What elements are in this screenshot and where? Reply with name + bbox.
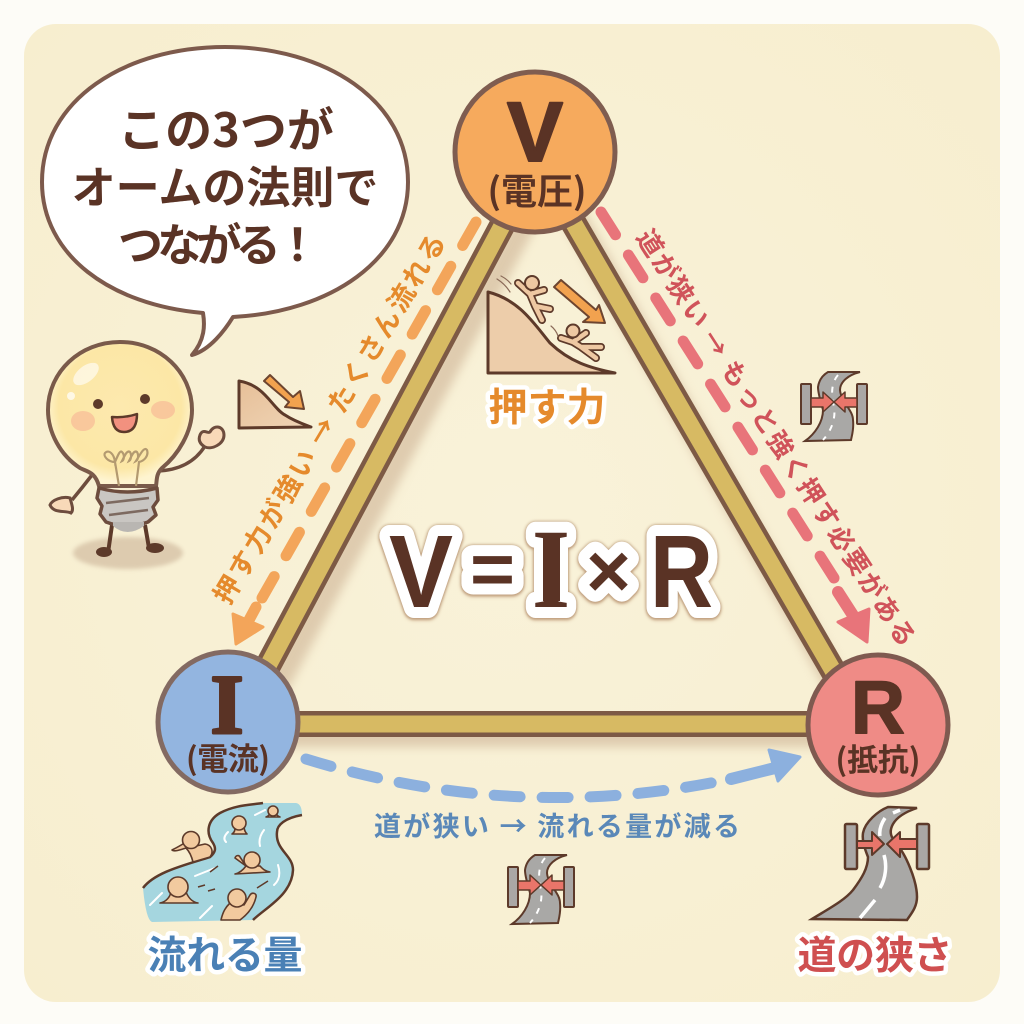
node: I current — [158, 652, 298, 792]
small slope icon — [239, 375, 311, 428]
triangle frame — [237, 160, 865, 735]
large road icon — [812, 807, 929, 920]
node: V voltage: V — [507, 85, 563, 179]
formula: = — [470, 530, 515, 610]
formula: I — [532, 507, 570, 632]
speech bubble: つながる！ — [118, 209, 320, 274]
small road icon: center — [508, 855, 574, 924]
river with swimmers — [143, 803, 302, 922]
node: V voltage — [455, 72, 615, 232]
formula — [389, 507, 713, 632]
node: I current: (電流) — [186, 734, 270, 779]
left edge label: 押す力が強い → たくさん流れる — [202, 225, 453, 610]
light bulb character — [48, 342, 224, 569]
speech bubble — [42, 47, 408, 355]
label: push force: 押す力 — [488, 377, 606, 433]
speech bubble: オームの法則で — [72, 152, 378, 216]
small road icon: right — [801, 372, 867, 441]
label: road narrowness: 道の狭さ — [798, 925, 952, 981]
node: R resistance: R — [851, 665, 905, 749]
formula: V — [389, 514, 453, 629]
node: R resistance: (抵抗) — [836, 735, 920, 780]
slope icon with sliding figures — [488, 276, 615, 373]
right edge label: 道が狭い → もっと強く押す必要がある — [629, 221, 926, 653]
formula: R — [650, 514, 713, 629]
speech bubble: この3つが — [118, 92, 334, 161]
bottom edge label: 道が狭い → 流れる量が減る — [374, 805, 740, 844]
label: flow amount: 流れる量 — [148, 925, 302, 981]
formula: × — [586, 529, 631, 614]
blue dashed arrow: I to R — [306, 750, 800, 798]
node: R resistance — [808, 655, 948, 795]
red dashed arrow: V to R edge — [601, 212, 869, 642]
node: I current: I — [210, 658, 244, 752]
orange dashed arrow: I to V edge — [233, 222, 476, 644]
node: V voltage: (電圧) — [488, 163, 586, 215]
